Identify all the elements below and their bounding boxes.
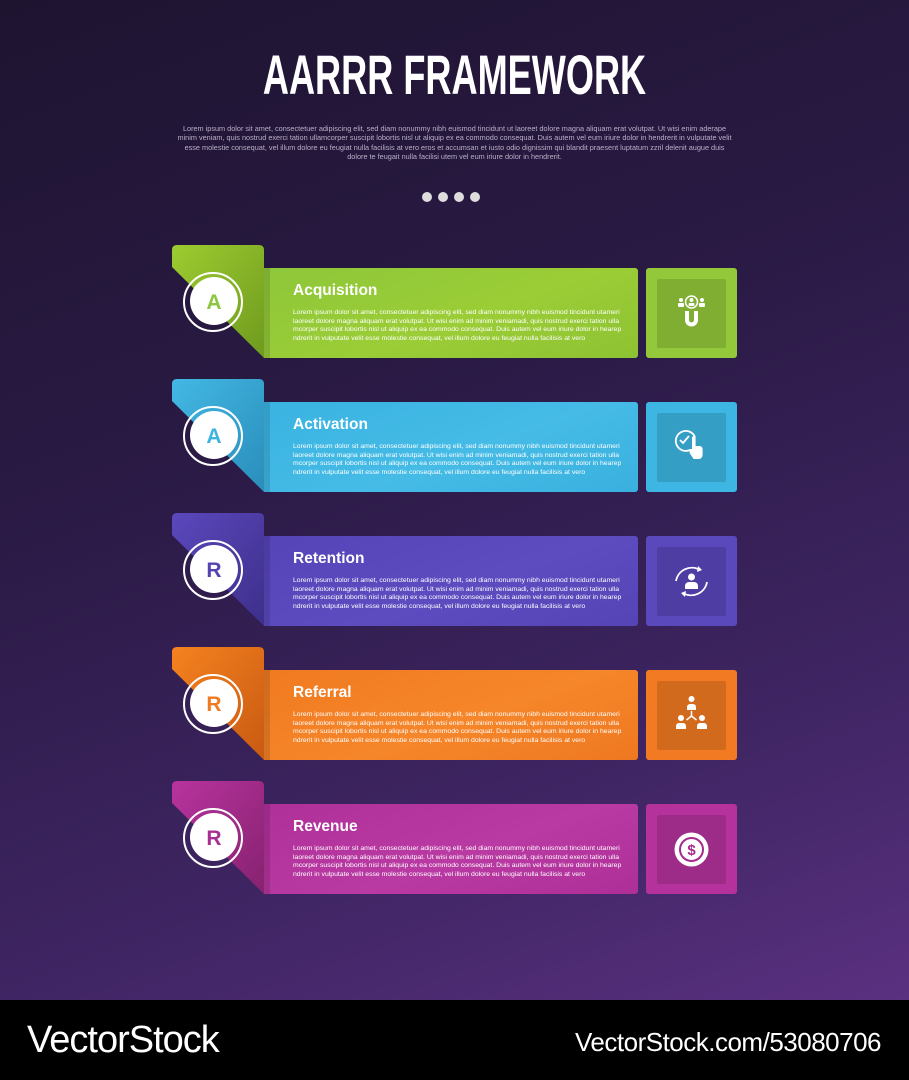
- icon: referral network: [646, 670, 737, 760]
- bar: Referral: [293, 684, 352, 701]
- row: referral: [172, 647, 737, 760]
- bar: [264, 536, 638, 626]
- footer: [0, 1000, 909, 1080]
- tab with letter circle: A: [206, 291, 222, 314]
- bar: Acquisition: [293, 282, 377, 299]
- row: revenue: [172, 781, 737, 894]
- icon: coin: $: [687, 842, 696, 859]
- bar: [264, 402, 638, 492]
- footer url: VectorStock.com/53080706: [575, 1027, 881, 1057]
- bar: [264, 268, 638, 358]
- icon: magnet people: [646, 268, 737, 358]
- bar: Retention: [293, 550, 364, 567]
- bar: Lorem ipsum dolor sit amet, consectetuer adipiscing elit, sed diam nonummy nibh euismod tincidunt utameri laoreet dolore magna aliquam erat volutpat. Ut wisi enim ad minim veniamadi, quis nostrud exerci tation ulla mcorper suscipit lobortis nisl ut aliquip ex ea commodo consequat. Duis autem vel eum iriure dolor in hearep ndrerit in vulputate velit esse molestie consequat, vel illum dolore eu feugiat nulla facilisis at vero: [293, 309, 621, 342]
- icon: check touch: [646, 402, 737, 492]
- tab with letter circle: [172, 379, 264, 492]
- icon: retention cycle: [646, 536, 737, 626]
- row: acquisition: [172, 245, 737, 358]
- tab with letter circle: [172, 513, 264, 626]
- tab with letter circle: A: [206, 425, 222, 448]
- tab with letter circle: [172, 245, 264, 358]
- icon: coin: [646, 804, 737, 894]
- bar: Lorem ipsum dolor sit amet, consectetuer adipiscing elit, sed diam nonummy nibh euismod tincidunt utameri laoreet dolore magna aliquam erat volutpat. Ut wisi enim ad minim veniamadi, quis nostrud exerci tation ulla mcorper suscipit lobortis nisl ut aliquip ex ea commodo consequat. Duis autem vel eum iriure dolor in hearep ndrerit in vulputate velit esse molestie consequat, vel illum dolore eu feugiat nulla facilisis at vero: [293, 845, 621, 878]
- intro text: Lorem ipsum dolor sit amet, consectetuer adipiscing elit, sed diam nonummy nibh euismod tincidunt ut laoreet dolore magna aliquam erat volutpat. Ut wisi enim aderape minim veniam, quis nostrud exerci tation ullamcorper suscipit lobortis nisl ut aliquip ex ea commodo consequat. Duis autem vel eum iriure dolor in hendrerit in vulputate velit esse molestie consequat, vel illum dolore eu feugiat nulla facilisis at vero eros et accumsan et iusto odio dignissim qui blandit praesent luptatum zzril delenit augue duis dolore te feugait nulla facilisi utem vel eum iriure dolor in hendrerit.: [177, 124, 732, 161]
- bar: Activation: [293, 416, 368, 433]
- row: retention: [172, 513, 737, 626]
- footer brand: VectorStock: [27, 1019, 219, 1061]
- dots: [422, 192, 480, 202]
- bar: [264, 670, 638, 760]
- tab with letter circle: [172, 781, 264, 894]
- bar: Lorem ipsum dolor sit amet, consectetuer adipiscing elit, sed diam nonummy nibh euismod tincidunt utameri laoreet dolore magna aliquam erat volutpat. Ut wisi enim ad minim veniamadi, quis nostrud exerci tation ulla mcorper suscipit lobortis nisl ut aliquip ex ea commodo consequat. Duis autem vel eum iriure dolor in hearep ndrerit in vulputate velit esse molestie consequat, vel illum dolore eu feugiat nulla facilisis at vero: [293, 443, 621, 476]
- tab with letter circle: R: [206, 559, 222, 582]
- bar: Lorem ipsum dolor sit amet, consectetuer adipiscing elit, sed diam nonummy nibh euismod tincidunt utameri laoreet dolore magna aliquam erat volutpat. Ut wisi enim ad minim veniamadi, quis nostrud exerci tation ulla mcorper suscipit lobortis nisl ut aliquip ex ea commodo consequat. Duis autem vel eum iriure dolor in hearep ndrerit in vulputate velit esse molestie consequat, vel illum dolore eu feugiat nulla facilisis at vero: [293, 711, 621, 744]
- bar: Lorem ipsum dolor sit amet, consectetuer adipiscing elit, sed diam nonummy nibh euismod tincidunt utameri laoreet dolore magna aliquam erat volutpat. Ut wisi enim ad minim veniamadi, quis nostrud exerci tation ulla mcorper suscipit lobortis nisl ut aliquip ex ea commodo consequat. Duis autem vel eum iriure dolor in hearep ndrerit in vulputate velit esse molestie consequat, vel illum dolore eu feugiat nulla facilisis at vero: [293, 577, 621, 610]
- row: activation: [172, 379, 737, 492]
- bar: Revenue: [293, 818, 358, 835]
- tab with letter circle: R: [206, 693, 222, 716]
- tab with letter circle: R: [206, 827, 222, 850]
- title: AARRR FRAMEWORK: [263, 43, 646, 106]
- bar: [264, 804, 638, 894]
- tab with letter circle: [172, 647, 264, 760]
